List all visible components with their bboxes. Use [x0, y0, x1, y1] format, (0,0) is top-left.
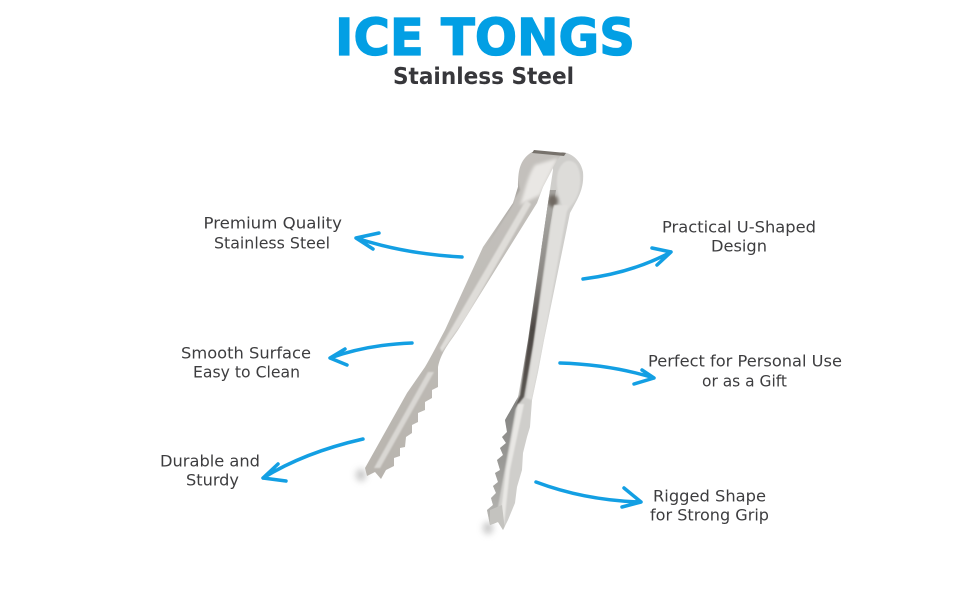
title: ICE TONGS — [335, 9, 635, 68]
label: rigged shape: for Strong Grip — [650, 506, 769, 524]
arrow: durable — [263, 439, 363, 481]
tong tip shadows — [356, 469, 493, 534]
arrow: smooth surface — [330, 343, 412, 365]
label: u-shaped design: Practical U-Shaped — [662, 218, 816, 236]
label: u-shaped design: Design — [711, 238, 767, 256]
infographic canvas — [162, 16, 842, 536]
label: durable: Durable and — [160, 452, 260, 470]
label: premium quality: Premium Quality — [204, 214, 342, 232]
arrow: u-shaped design — [583, 248, 671, 279]
callout: premium quality — [204, 214, 462, 257]
label: smooth surface: Smooth Surface — [181, 344, 311, 362]
top rim — [532, 150, 566, 156]
subtitle: Stainless Steel — [393, 64, 574, 90]
callout: smooth surface — [181, 343, 412, 382]
arrow: rigged shape — [536, 482, 641, 507]
label: rigged shape: Rigged Shape — [653, 488, 766, 506]
callout: u-shaped design — [583, 218, 816, 279]
label: personal use: or as a Gift — [702, 372, 787, 390]
label: smooth surface: Easy to Clean — [193, 364, 300, 382]
label: durable: Sturdy — [186, 472, 239, 490]
arrow: personal use — [560, 363, 654, 384]
callout: rigged shape — [536, 482, 769, 524]
label: premium quality: Stainless Steel — [214, 234, 330, 252]
arrow: premium quality — [356, 233, 462, 257]
callout: personal use — [560, 352, 842, 390]
callout: durable — [160, 439, 363, 490]
label: personal use: Perfect for Personal Use — [648, 352, 842, 370]
ice tongs illustration — [356, 145, 590, 535]
left tong arm — [360, 145, 570, 485]
right tong arm — [487, 152, 584, 530]
